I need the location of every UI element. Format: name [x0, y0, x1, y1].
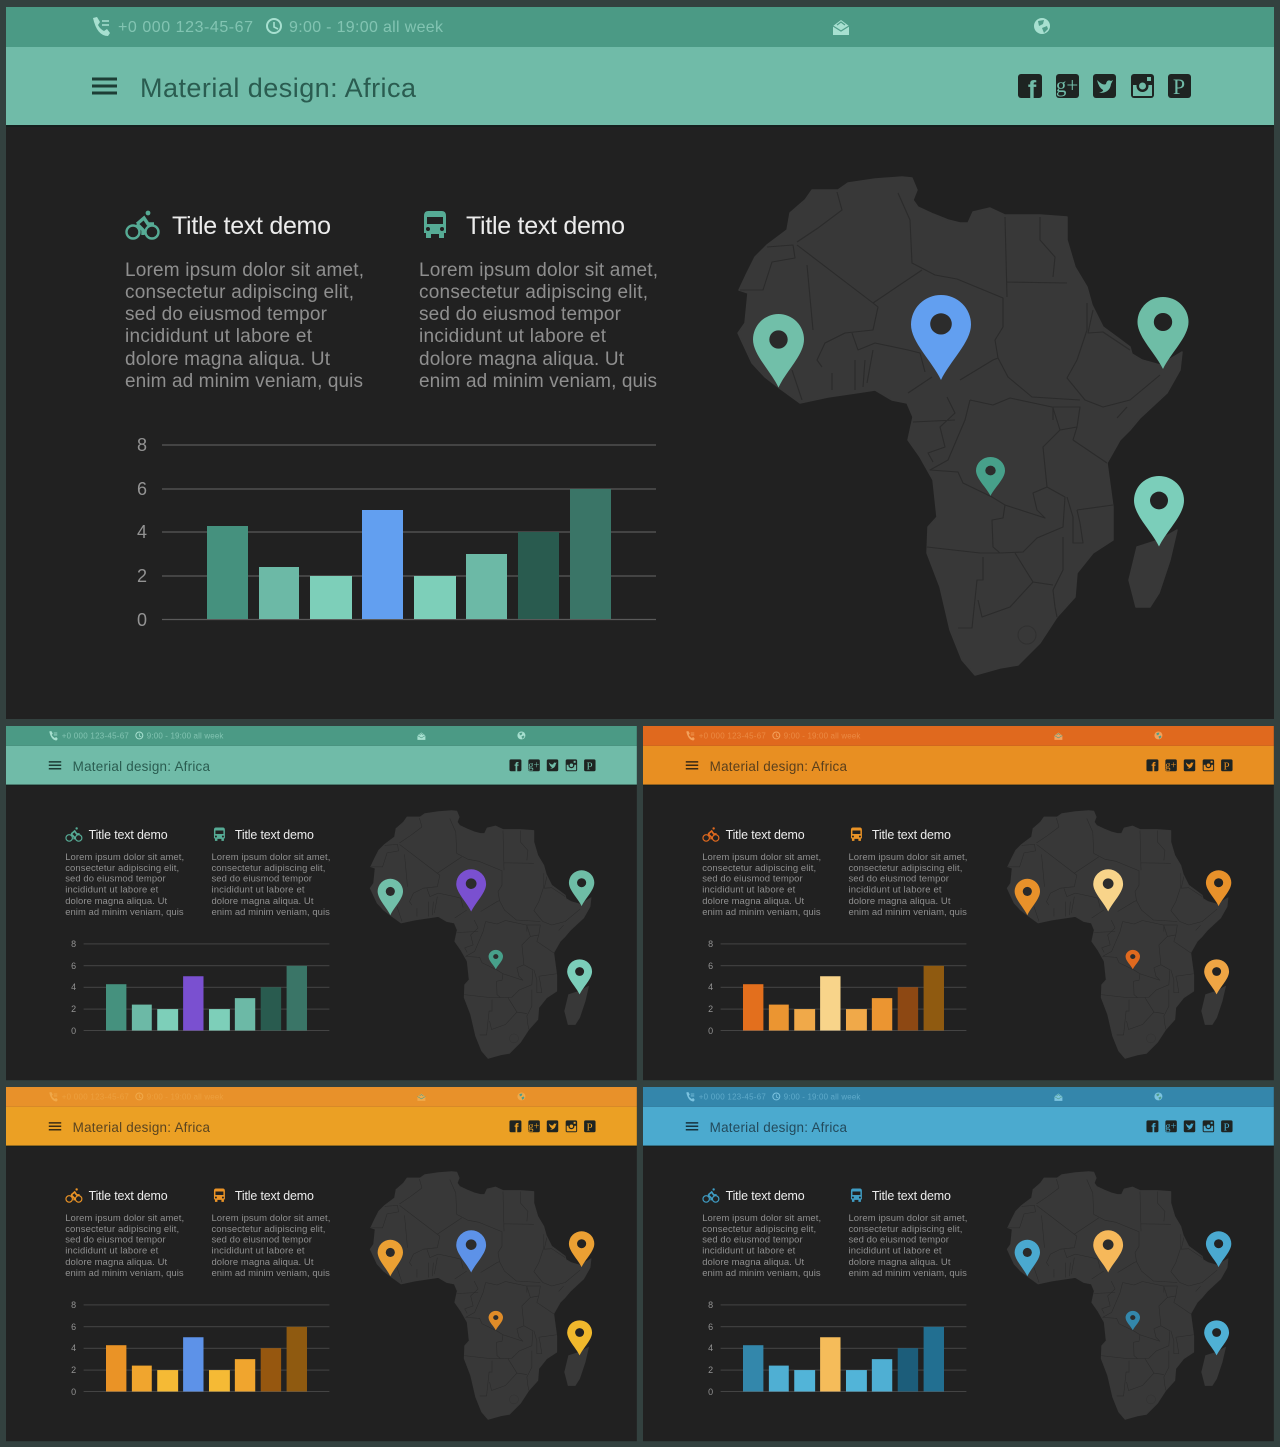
text block: column one: [702, 827, 821, 918]
header bar: Material design: Africa: [710, 759, 848, 774]
text block: column two: [211, 1188, 330, 1279]
social icons: g+: [1056, 73, 1078, 97]
bar chart: 4: [708, 982, 713, 992]
header bar: [6, 47, 1274, 127]
bar chart: 6: [71, 1322, 76, 1332]
text block: column one: enim ad minim veniam, quis: [702, 1268, 821, 1279]
text block: column one: Lorem ipsum dolor sit amet,: [65, 1213, 184, 1224]
social icons: g+: [528, 1121, 540, 1132]
text block: column one: Title text demo: [726, 1189, 805, 1203]
top contact bar: 9:00 - 19:00 all week: [784, 731, 860, 740]
top contact bar: 9:00 - 19:00 all week: [147, 731, 223, 740]
text block: column one: sed do eiusmod tempor: [702, 874, 803, 885]
social icons: f: [1028, 76, 1037, 104]
text block: column two: Lorem ipsum dolor sit amet,: [848, 852, 967, 863]
bar chart: [708, 1300, 966, 1397]
top contact bar: 9:00 - 19:00 all week: [289, 19, 444, 36]
text block: column two: dolore magna aliqua. Ut: [848, 1257, 951, 1268]
text block: column two: dolore magna aliqua. Ut: [211, 1257, 314, 1268]
text block: column two: enim ad minim veniam, quis: [419, 371, 657, 392]
social icons: P: [1224, 1121, 1230, 1133]
top contact bar: 9:00 - 19:00 all week: [784, 1092, 860, 1101]
social icons: f: [514, 760, 519, 774]
bar chart: 2: [71, 1365, 76, 1375]
map: Africa with location pins: [370, 1172, 594, 1419]
social icons: g+: [1165, 1121, 1177, 1132]
top contact bar: +0 000 123-45-67: [699, 731, 766, 740]
text block: column two: dolore magna aliqua. Ut: [848, 896, 951, 907]
map: Africa with location pins: [1007, 811, 1231, 1058]
text block: column one: [702, 1188, 821, 1279]
text block: column two: Lorem ipsum dolor sit amet,: [848, 1213, 967, 1224]
bar chart: 0: [708, 1387, 713, 1397]
top contact bar: [6, 7, 1274, 47]
panel: teal and purple variant: [6, 726, 637, 1080]
text block: column two: Title text demo: [235, 828, 314, 842]
text block: column two: [848, 1188, 967, 1279]
header bar: Material design: Africa: [140, 73, 417, 103]
text block: column two: Lorem ipsum dolor sit amet,: [211, 1213, 330, 1224]
top contact bar: +0 000 123-45-67: [62, 731, 129, 740]
text block: column two: incididunt ut labore et: [211, 1246, 305, 1257]
text block: column one: incididunt ut labore et: [65, 885, 159, 896]
bar chart: 6: [71, 961, 76, 971]
bar chart: 0: [71, 1026, 76, 1036]
panel background: [643, 726, 1274, 1080]
text block: column one: Title text demo: [89, 1189, 168, 1203]
text block: column two: consectetur adipiscing elit,: [211, 1224, 325, 1235]
text block: column two: sed do eiusmod tempor: [848, 1235, 949, 1246]
text block: column two: consectetur adipiscing elit,: [848, 1224, 962, 1235]
text block: column one: consectetur adipiscing elit,: [702, 863, 816, 874]
text block: column one: enim ad minim veniam, quis: [702, 907, 821, 918]
text block: column one: incididunt ut labore et: [65, 1246, 159, 1257]
text block: column two: incididunt ut labore et: [848, 885, 942, 896]
text block: column one: Title text demo: [89, 828, 168, 842]
text block: column one: Lorem ipsum dolor sit amet,: [125, 260, 364, 281]
social icons: f: [514, 1121, 519, 1135]
text block: column two: consectetur adipiscing elit,: [211, 863, 325, 874]
text block: column one: sed do eiusmod tempor: [125, 304, 328, 325]
bar chart: 4: [71, 1343, 76, 1353]
text block: column one: Lorem ipsum dolor sit amet,: [702, 1213, 821, 1224]
text block: column two: consectetur adipiscing elit,: [848, 863, 962, 874]
social icons: P: [587, 760, 593, 772]
social icons: g+: [528, 760, 540, 771]
top contact bar: [6, 726, 637, 746]
bar chart: 0: [137, 610, 147, 630]
social icons: [1146, 1120, 1233, 1135]
text block: column two: enim ad minim veniam, quis: [211, 907, 330, 918]
text block: column two: sed do eiusmod tempor: [211, 874, 312, 885]
text block: column two: sed do eiusmod tempor: [848, 874, 949, 885]
map: Africa with location pins: [370, 811, 594, 1058]
bar chart: 8: [71, 1300, 76, 1310]
bar chart: 0: [71, 1387, 76, 1397]
panel: amber variant: [6, 1087, 637, 1441]
social icons: f: [1151, 760, 1156, 774]
text block: column one: enim ad minim veniam, quis: [65, 1268, 184, 1279]
bar chart: 4: [708, 1343, 713, 1353]
text block: column one: Lorem ipsum dolor sit amet,: [702, 852, 821, 863]
text block: column one: dolore magna aliqua. Ut: [125, 349, 331, 370]
text block: column two: incididunt ut labore et: [211, 885, 305, 896]
text block: column one: dolore magna aliqua. Ut: [702, 896, 805, 907]
text block: column two: dolore magna aliqua. Ut: [419, 349, 625, 370]
text block: column one: sed do eiusmod tempor: [65, 1235, 166, 1246]
social icons: g+: [1165, 760, 1177, 771]
header bar: Material design: Africa: [73, 1120, 211, 1135]
top contact bar: [643, 726, 1274, 746]
top contact bar: +0 000 123-45-67: [62, 1092, 129, 1101]
text block: column two: Title text demo: [466, 212, 625, 240]
social icons: P: [1224, 760, 1230, 772]
panel: orange variant: [643, 726, 1274, 1080]
text block: column one: consectetur adipiscing elit,: [65, 1224, 179, 1235]
social icons: [1146, 759, 1233, 774]
panel background: [6, 7, 1274, 719]
bar chart: 4: [137, 522, 147, 542]
text block: column one: incididunt ut labore et: [702, 885, 796, 896]
text block: column one: [125, 211, 364, 392]
panel background: [6, 1087, 637, 1441]
text block: column one: sed do eiusmod tempor: [702, 1235, 803, 1246]
top contact bar: +0 000 123-45-67: [118, 19, 253, 36]
social icons: P: [587, 1121, 593, 1133]
text block: column one: [65, 827, 184, 918]
header bar: Material design: Africa: [710, 1120, 848, 1135]
bar chart: [137, 435, 656, 630]
text block: column two: dolore magna aliqua. Ut: [211, 896, 314, 907]
text block: column one: sed do eiusmod tempor: [65, 874, 166, 885]
bar chart: [708, 939, 966, 1036]
text block: column two: Lorem ipsum dolor sit amet,: [419, 260, 658, 281]
top contact bar: 9:00 - 19:00 all week: [147, 1092, 223, 1101]
text block: column one: Lorem ipsum dolor sit amet,: [65, 852, 184, 863]
text block: column one: incididunt ut labore et: [125, 326, 313, 347]
text block: column one: enim ad minim veniam, quis: [65, 907, 184, 918]
bar chart: 0: [708, 1026, 713, 1036]
bar chart: 4: [71, 982, 76, 992]
bar chart: 2: [137, 566, 147, 586]
panel background: [643, 1087, 1274, 1441]
text block: column one: dolore magna aliqua. Ut: [65, 1257, 168, 1268]
panel: main Africa slide: [6, 7, 1274, 719]
text block: column two: [848, 827, 967, 918]
top contact bar: +0 000 123-45-67: [699, 1092, 766, 1101]
panel: blue variant: [643, 1087, 1274, 1441]
bar chart: 6: [708, 1322, 713, 1332]
text block: column two: enim ad minim veniam, quis: [211, 1268, 330, 1279]
header bar: Material design: Africa: [73, 759, 211, 774]
text block: column two: enim ad minim veniam, quis: [848, 1268, 967, 1279]
bar chart: 2: [71, 1004, 76, 1014]
text block: column one: dolore magna aliqua. Ut: [702, 1257, 805, 1268]
bar chart: 2: [708, 1365, 713, 1375]
bar chart: 6: [708, 961, 713, 971]
text block: column two: Title text demo: [872, 828, 951, 842]
text block: column two: [419, 211, 658, 392]
text block: column two: Title text demo: [872, 1189, 951, 1203]
social icons: f: [1151, 1121, 1156, 1135]
text block: column one: enim ad minim veniam, quis: [125, 371, 363, 392]
text block: column two: incididunt ut labore et: [419, 326, 607, 347]
text block: column one: Title text demo: [172, 212, 331, 240]
bar chart: 8: [137, 435, 147, 455]
map: Africa with location pins: [1007, 1172, 1231, 1419]
text block: column one: [65, 1188, 184, 1279]
social icons: P: [1173, 74, 1185, 99]
text block: column two: sed do eiusmod tempor: [211, 1235, 312, 1246]
header bar: [6, 746, 637, 786]
text block: column two: consectetur adipiscing elit,: [419, 282, 648, 303]
bar chart: 8: [71, 939, 76, 949]
text block: column one: consectetur adipiscing elit,: [125, 282, 354, 303]
bar chart: [71, 939, 329, 1036]
header bar: [643, 746, 1274, 786]
text block: column two: sed do eiusmod tempor: [419, 304, 622, 325]
social icons: [509, 1120, 596, 1135]
text block: column one: incididunt ut labore et: [702, 1246, 796, 1257]
text block: column two: [211, 827, 330, 918]
text block: column two: enim ad minim veniam, quis: [848, 907, 967, 918]
text block: column two: incididunt ut labore et: [848, 1246, 942, 1257]
bar chart: 2: [708, 1004, 713, 1014]
text block: column one: consectetur adipiscing elit,: [65, 863, 179, 874]
panel background: [6, 726, 637, 1080]
bar chart: 8: [708, 939, 713, 949]
text block: column one: Title text demo: [726, 828, 805, 842]
map: Africa with location pins: [738, 177, 1188, 675]
text block: column one: consectetur adipiscing elit,: [702, 1224, 816, 1235]
text block: column two: Lorem ipsum dolor sit amet,: [211, 852, 330, 863]
text block: column two: Title text demo: [235, 1189, 314, 1203]
text block: column one: dolore magna aliqua. Ut: [65, 896, 168, 907]
top contact bar: [643, 1087, 1274, 1107]
bar chart: 8: [708, 1300, 713, 1310]
header bar: [643, 1107, 1274, 1147]
social icons: [1018, 73, 1191, 104]
bar chart: 6: [137, 479, 147, 499]
bar chart: [71, 1300, 329, 1397]
social icons: [509, 759, 596, 774]
header bar: [6, 1107, 637, 1147]
top contact bar: [6, 1087, 637, 1107]
